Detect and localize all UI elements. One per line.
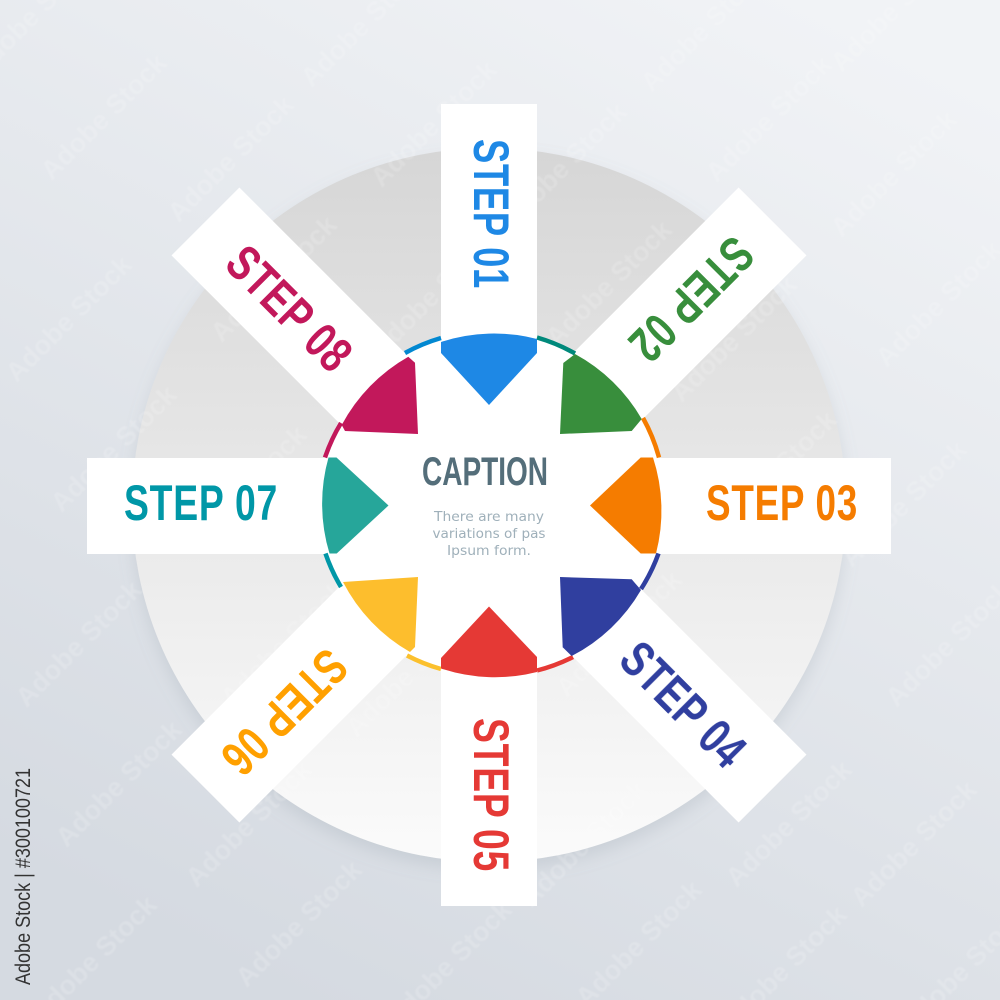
text: Adobe Stock: [340, 604, 478, 743]
text: Adobe Stock: [215, 574, 353, 713]
text: Adobe Stock: [720, 754, 858, 893]
label: step 06: STEP 06: [210, 638, 359, 787]
text: Adobe Stock: [162, 89, 300, 228]
text block: description: There are many: [433, 509, 544, 525]
wedge: step 03 orange: [590, 458, 661, 554]
text: Adobe Stock: [10, 574, 148, 713]
wedge: step 02 green: [560, 354, 642, 434]
panel: white bands: [87, 104, 891, 906]
label: step 04: STEP 04: [609, 630, 758, 779]
panel: center circle: [318, 331, 666, 679]
text: Adobe Stock: [495, 96, 633, 235]
wedge: step 07 teal: [322, 458, 388, 554]
text: Adobe Stock: [700, 49, 838, 188]
text: Adobe Stock: [550, 564, 688, 703]
text block: description: [432, 509, 546, 559]
text: Adobe Stock: [50, 714, 188, 853]
text: Adobe Stock: [825, 104, 963, 243]
label: step 07: STEP 07: [124, 475, 278, 531]
label: step 08: STEP 08: [215, 234, 364, 383]
text block: description: variations of pas: [432, 526, 546, 542]
label: step 05: STEP 05: [463, 718, 519, 872]
wedge: step 05 red: [441, 606, 537, 677]
text: Adobe Stock: [520, 424, 658, 563]
text: Adobe Stock: [515, 774, 653, 913]
label: step 02: STEP 02: [618, 226, 765, 373]
text: Adobe Stock: [845, 774, 983, 913]
ring segments: [325, 338, 659, 670]
wedge: step 08 magenta: [342, 357, 418, 434]
text: Adobe Stock: [365, 224, 503, 363]
text: Adobe Stock: [45, 379, 183, 518]
text: Adobe Stock: [665, 269, 803, 408]
background disc: [132, 148, 846, 862]
text: Adobe Stock: [705, 404, 843, 543]
text: Adobe Stock: [175, 419, 313, 558]
text: Adobe Stock: [395, 364, 533, 503]
text: Adobe Stock: [0, 249, 138, 388]
label: step 01: STEP 01: [463, 139, 519, 289]
text: Adobe Stock: [35, 47, 173, 186]
text: Adobe Stock: [180, 754, 318, 893]
text: Adobe Stock: [540, 214, 678, 353]
text block: description: Ipsum form.: [447, 543, 531, 559]
text: Adobe Stock: [205, 209, 343, 348]
text: Adobe Stock: [835, 434, 973, 573]
label: step 03: STEP 03: [706, 475, 858, 531]
text: Adobe Stock: [365, 54, 503, 193]
wedge: step 06 yellow: [343, 577, 418, 652]
heading: caption: CAPTION: [422, 450, 548, 494]
wedge: step 04 navy: [560, 577, 641, 656]
text: Adobe Stock: [230, 854, 368, 993]
wedge: step 01 blue: [441, 334, 537, 405]
stock credit: Adobe Stock | #300100721: [12, 768, 35, 985]
